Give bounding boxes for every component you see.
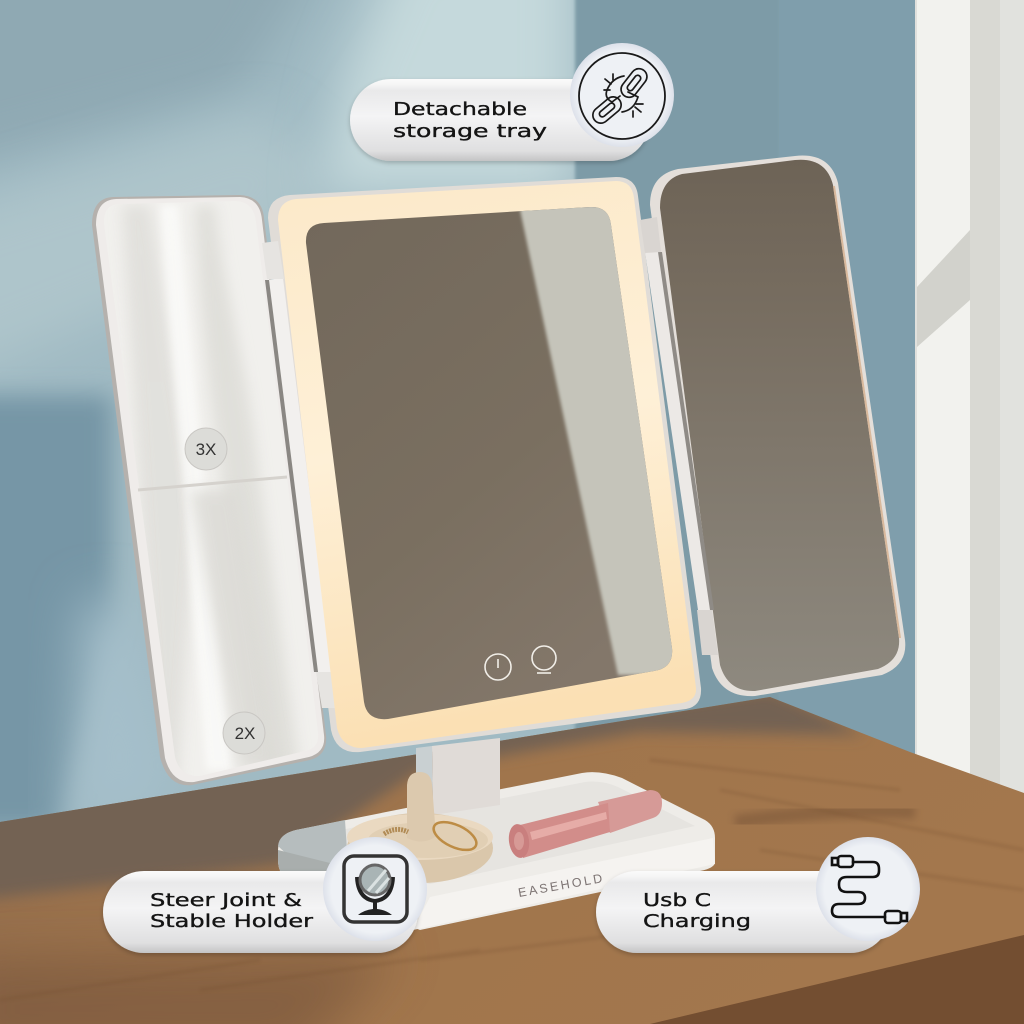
label text <box>393 99 547 142</box>
label text <box>643 890 751 932</box>
callout: usb c charging <box>596 837 920 953</box>
label text: Detachable <box>393 99 527 120</box>
left hinge <box>262 241 342 708</box>
icon: tabletop mirror <box>323 837 427 941</box>
divider <box>138 477 287 490</box>
mirror reflections <box>122 205 300 780</box>
power touch button <box>485 654 511 680</box>
label text: Stable Holder <box>150 911 314 932</box>
callout: detachable storage tray <box>350 43 674 161</box>
right side mirror panel <box>650 156 905 696</box>
ring dish with rings <box>347 772 493 883</box>
label text: Steer Joint & <box>150 890 302 911</box>
mirror window reflection <box>519 205 685 675</box>
right hinge <box>640 217 718 655</box>
3x magnifier: 3X <box>196 440 216 459</box>
light touch button <box>532 646 556 673</box>
callout: steer joint and stable holder <box>103 837 427 953</box>
table top <box>0 690 1024 1024</box>
lip gloss <box>507 790 662 859</box>
label text: storage tray <box>393 121 547 142</box>
icon: broken chain <box>570 43 674 147</box>
label text: Usb C <box>643 890 711 911</box>
storage tray <box>278 772 715 930</box>
left side mirror panel <box>92 195 326 785</box>
3x magnifier <box>185 428 227 470</box>
brand name: EASEHOLD <box>517 871 603 900</box>
2x magnifier: 2X <box>235 724 255 743</box>
center mirror frame <box>268 177 701 752</box>
label text: Charging <box>643 911 751 932</box>
icon: usb cable <box>816 837 920 941</box>
stand neck <box>416 738 500 818</box>
label text <box>150 890 314 932</box>
center mirror <box>278 181 696 748</box>
window frame <box>915 0 1024 810</box>
2x magnifier <box>223 712 265 754</box>
